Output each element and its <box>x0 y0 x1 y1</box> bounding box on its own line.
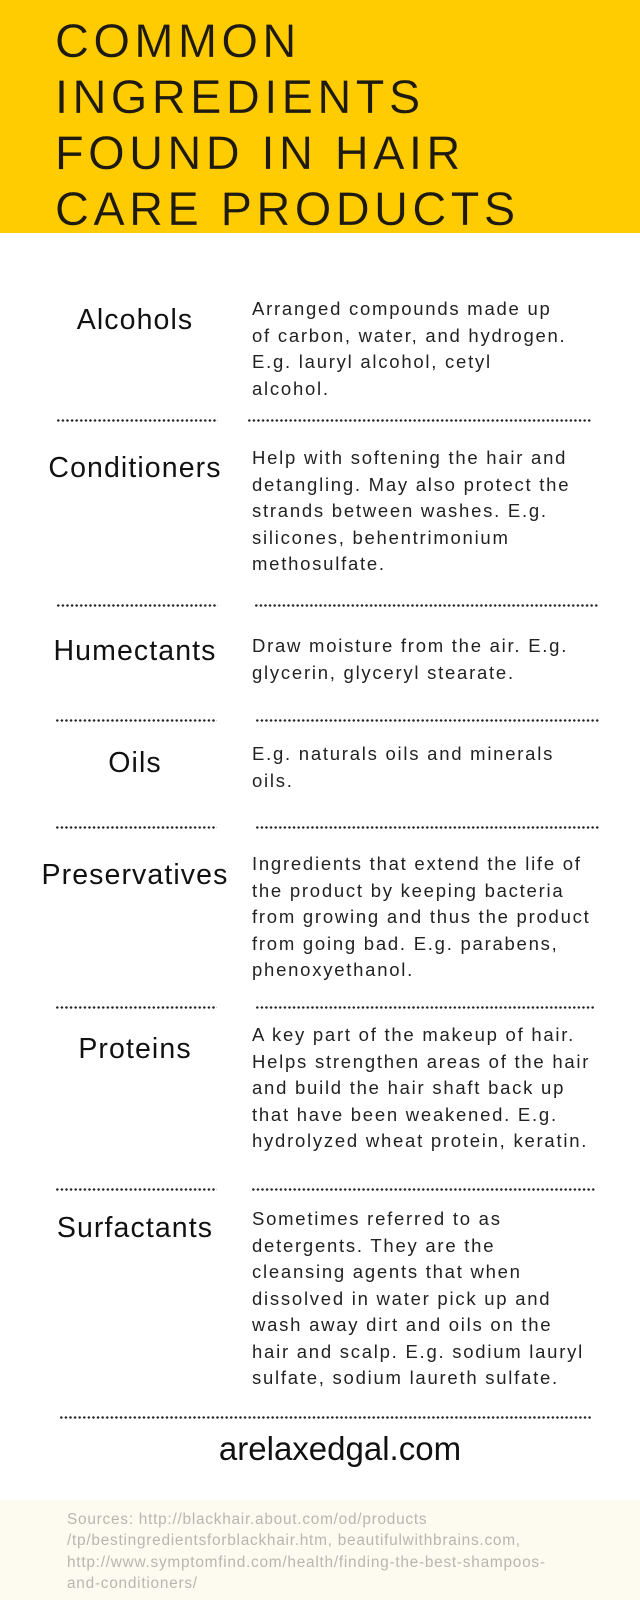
desc: Preservatives: Ingredients that extend the life of <box>252 853 582 874</box>
desc: Proteins: that have been weakened. E.g. <box>252 1104 558 1124</box>
desc: Humectants: glycerin, glyceryl stearate. <box>252 662 515 682</box>
sources text: http://www.symptomfind.com/health/finding-the-best-shampoos- <box>67 1554 546 1571</box>
desc: Surfactants: wash away dirt and oils on the <box>252 1314 552 1335</box>
desc: Surfactants: dissolved in water pick up and <box>252 1288 551 1308</box>
label: Alcohols: Alcohols <box>77 304 193 336</box>
desc: Conditioners: silicones, behentrimonium <box>252 526 510 548</box>
label: Oils: Oils <box>108 747 162 779</box>
footer panel <box>0 1500 640 1600</box>
desc: Alcohols: of carbon, water, and hydrogen. <box>252 324 566 346</box>
desc: Proteins: Helps strengthen areas of the hair <box>252 1050 590 1072</box>
desc: Preservatives: from going bad. E.g. parabens, <box>252 932 559 954</box>
desc: Alcohols <box>252 298 566 398</box>
title: CARE PRODUCTS <box>55 182 520 235</box>
desc: Conditioners: Help with softening the hair and <box>252 447 567 468</box>
website credit: arelaxedgal.com <box>219 1430 461 1467</box>
label: Preservatives: Preservatives <box>42 859 228 891</box>
desc: Oils: oils. <box>252 770 294 790</box>
desc: Humectants: Draw moisture from the air. E.g. <box>252 635 568 656</box>
title: FOUND IN HAIR <box>55 126 465 179</box>
desc: Proteins: hydrolyzed wheat protein, keratin. <box>252 1130 588 1151</box>
desc: Preservatives: phenoxyethanol. <box>252 959 414 980</box>
desc: Preservatives: from growing and thus the product <box>252 906 590 927</box>
sources text <box>67 1511 546 1592</box>
desc: Conditioners <box>252 447 570 574</box>
label: Humectants: Humectants <box>53 635 217 667</box>
sources text: Sources: http://blackhair.about.com/od/products <box>67 1511 427 1528</box>
desc: Surfactants: Sometimes referred to as <box>252 1208 502 1229</box>
sources text: and-conditioners/ <box>67 1575 198 1592</box>
desc: Oils: E.g. naturals oils and minerals <box>252 743 554 764</box>
title <box>55 14 520 235</box>
desc: Surfactants <box>252 1208 584 1388</box>
desc: Preservatives <box>252 853 590 980</box>
label: Surfactants: Surfactants <box>57 1212 213 1244</box>
desc: Alcohols: Arranged compounds made up <box>252 298 552 319</box>
title: INGREDIENTS <box>55 70 425 123</box>
desc: Conditioners: detangling. May also protect the <box>252 474 570 494</box>
label: Proteins: Proteins <box>78 1033 192 1065</box>
label: Conditioners: Conditioners <box>48 452 222 484</box>
desc: Conditioners: methosulfate. <box>252 553 386 574</box>
desc: Alcohols: alcohol. <box>252 378 330 398</box>
desc: Surfactants: cleansing agents that when <box>252 1261 522 1282</box>
desc: Oils <box>252 743 554 790</box>
desc: Surfactants: sulfate, sodium laureth sulfate. <box>252 1367 559 1388</box>
title: COMMON <box>55 14 301 67</box>
desc: Preservatives: the product by keeping bacteria <box>252 880 564 900</box>
desc: Surfactants: detergents. They are the <box>252 1234 495 1256</box>
sources text: /tp/bestingredientsforblackhair.htm, beautifulwithbrains.com, <box>67 1532 521 1549</box>
desc: Proteins: A key part of the makeup of hair. <box>252 1024 575 1045</box>
desc: Conditioners: strands between washes. E.g. <box>252 500 548 521</box>
desc: Surfactants: hair and scalp. E.g. sodium lauryl <box>252 1340 584 1362</box>
desc: Proteins: and build the hair shaft back up <box>252 1077 565 1098</box>
header banner <box>0 0 640 233</box>
desc: Proteins <box>252 1024 590 1151</box>
desc: Alcohols: E.g. lauryl alcohol, cetyl <box>252 351 492 372</box>
desc: Humectants <box>252 635 568 683</box>
